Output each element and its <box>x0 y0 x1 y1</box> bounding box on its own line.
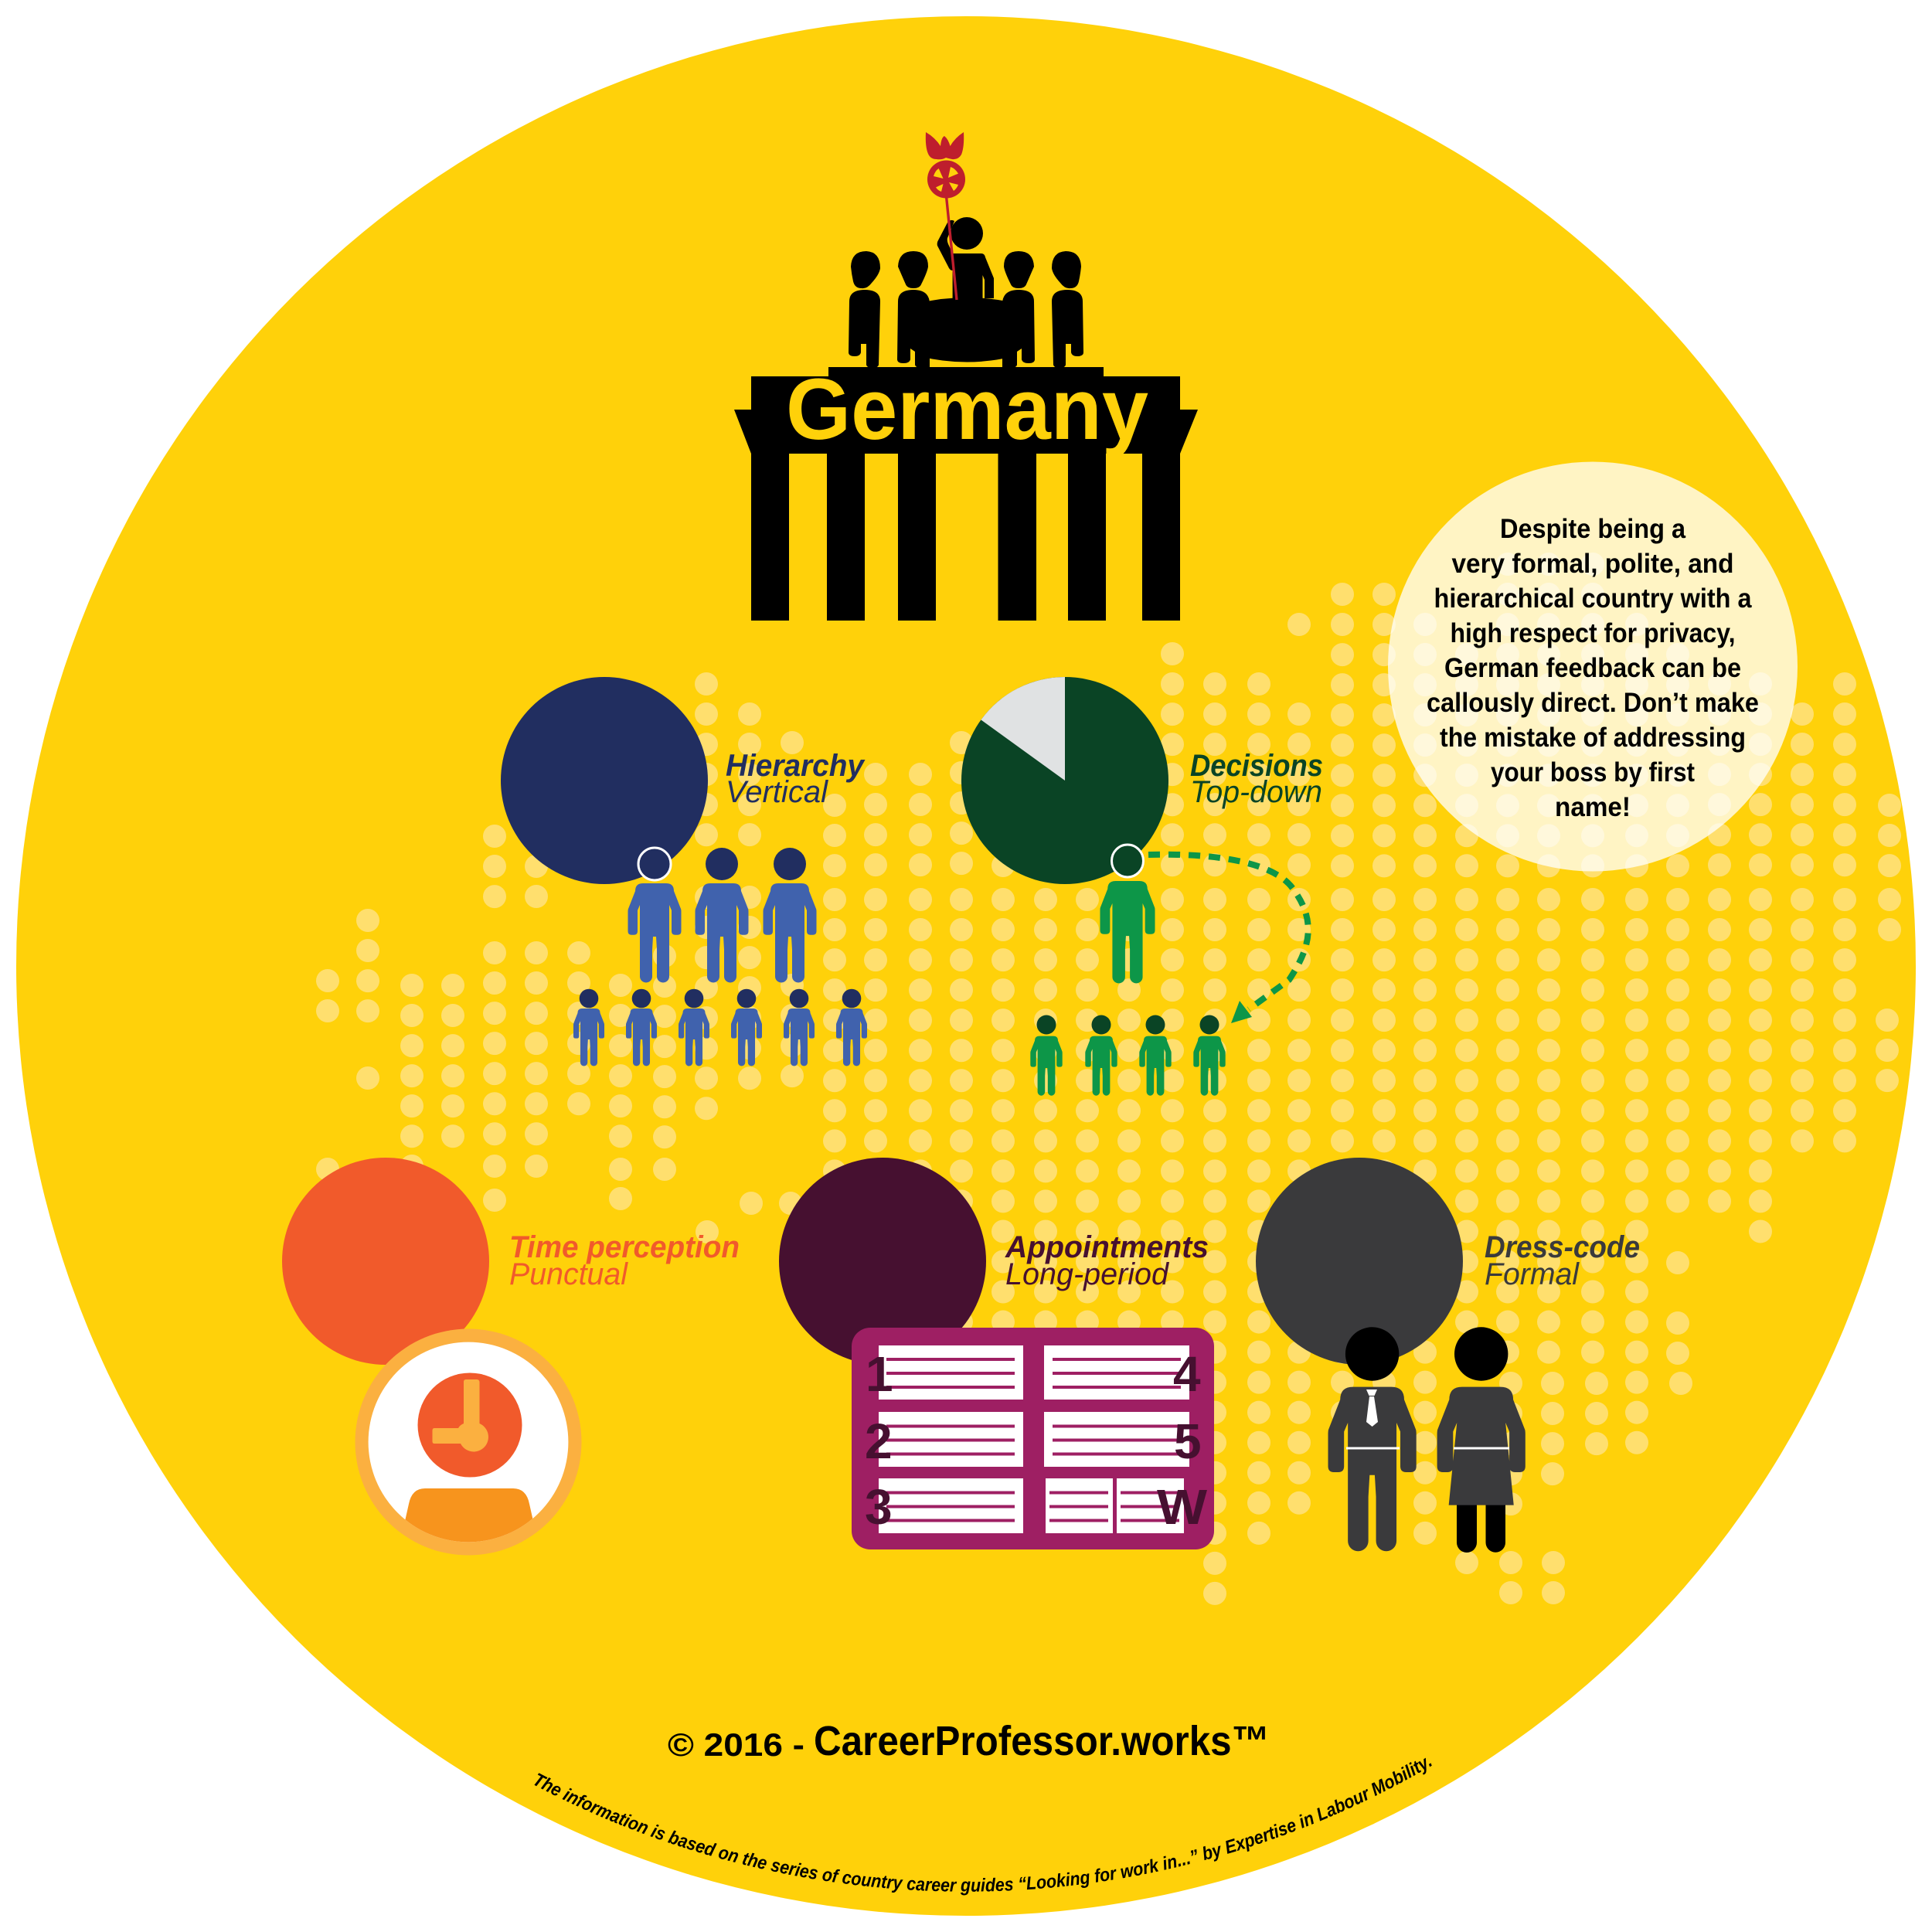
label: decisions: Top-down <box>1190 775 1322 809</box>
label: time perception <box>509 1230 740 1291</box>
label: dress code: Dress-code <box>1485 1230 1640 1264</box>
callout: cultural note bubble: the mistake of addressing <box>1440 723 1746 753</box>
panel: appointments <box>779 1158 1214 1549</box>
icon: round table <box>920 298 1014 362</box>
panel: time perception <box>282 1158 740 1555</box>
label: time perception: Time perception <box>509 1230 740 1264</box>
icon: calendar: 1 <box>866 1346 893 1402</box>
panel: decisions <box>961 677 1323 1096</box>
dotted world map <box>328 564 1889 1594</box>
callout: cultural note bubble <box>1388 462 1798 872</box>
panel: Brandenburg Gate with quadriga <box>734 132 1198 621</box>
label: decisions <box>1190 749 1323 809</box>
chart: time circle <box>282 1158 489 1365</box>
callout: cultural note bubble: high respect for privacy, <box>1450 618 1736 648</box>
arrow: dashed decision flow <box>1148 855 1308 1023</box>
icon: calendar <box>852 1328 1214 1549</box>
callout: cultural note bubble: hierarchical country with a <box>1434 583 1752 614</box>
panel: hierarchy <box>501 677 867 1066</box>
icon: calendar: 4 <box>1173 1346 1201 1402</box>
icon: gate building <box>734 367 1198 621</box>
icon: right figures <box>1002 251 1083 368</box>
label: appointments: Appointments <box>1005 1230 1209 1264</box>
icon: calendar: W <box>1157 1479 1208 1535</box>
footer: copyright: CareerProfessor.works™ <box>814 1718 1270 1764</box>
panel: dress code <box>1256 1158 1640 1553</box>
label: decisions: Decisions <box>1190 749 1323 783</box>
label: hierarchy <box>726 749 866 809</box>
chart: decisions pie <box>961 677 1168 884</box>
callout: cultural note bubble: name! <box>1555 792 1631 822</box>
callout: cultural note bubble: very formal, polite, and <box>1451 549 1734 579</box>
chart: hierarchy circle <box>501 677 708 884</box>
icon: six employees <box>573 989 867 1066</box>
icon: left figures <box>849 251 930 368</box>
callout: cultural note bubble: your boss by first <box>1491 757 1695 787</box>
icon: calendar: 2 <box>865 1413 893 1469</box>
icon: decision maker <box>1100 845 1155 983</box>
icon: calendar: 5 <box>1174 1413 1202 1469</box>
icon: calendar: 3 <box>865 1479 893 1535</box>
icon: three managers <box>628 848 816 983</box>
callout: cultural note bubble: German feedback can be <box>1444 653 1741 683</box>
label: dress code: Formal <box>1485 1257 1580 1291</box>
icon: red standard <box>926 132 965 300</box>
label: dress code <box>1485 1230 1640 1291</box>
label: hierarchy: Hierarchy <box>726 749 866 783</box>
label: appointments <box>1005 1230 1209 1291</box>
label: time perception: Punctual <box>509 1257 628 1291</box>
callout: cultural note bubble: Despite being a <box>1500 514 1685 544</box>
icon: woman in skirt <box>1437 1327 1526 1553</box>
chart: appointments circle <box>779 1158 986 1365</box>
icon: clock badge <box>355 1329 581 1555</box>
label: appointments: Long-period <box>1005 1257 1170 1291</box>
label: hierarchy: Vertical <box>726 775 828 809</box>
footer: curved source note: The information is based on the series of country career guides “Looking for work in...” by Expertise in Labour Mobility. <box>535 1757 1432 1895</box>
icon: man in suit <box>1328 1327 1417 1551</box>
icon: four employees <box>1030 1015 1226 1096</box>
footer: copyright: © 2016 - <box>668 1726 804 1763</box>
title: Germany <box>786 361 1148 457</box>
chart: dress code circle <box>1256 1158 1463 1365</box>
callout: cultural note bubble: callously direct. Don’t make <box>1427 688 1759 718</box>
icon: seated centre figure <box>937 217 994 298</box>
